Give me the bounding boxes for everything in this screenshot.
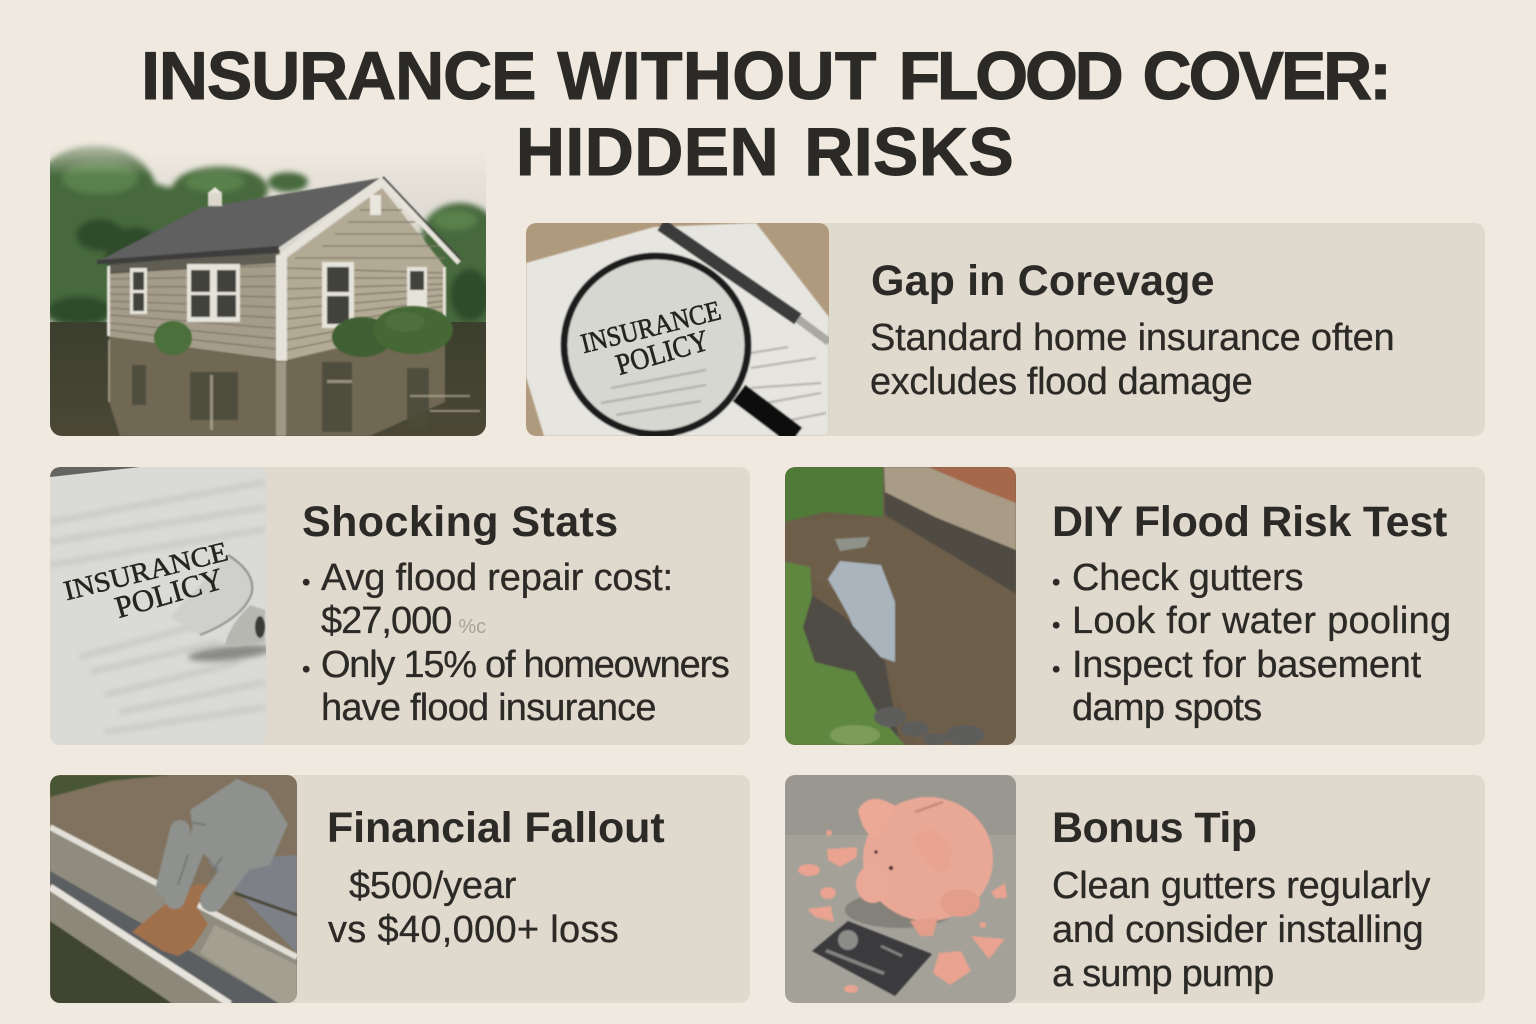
- heading: Financial Fallout: [327, 804, 665, 852]
- text block: Clean gutters regularly: [1052, 865, 1430, 907]
- heading: Shocking Stats: [302, 498, 619, 546]
- photo: broken piggy bank and credit card: [785, 775, 1016, 1003]
- panel: shocking stats: [50, 467, 750, 745]
- photo: wet ground by a wall: [785, 467, 1016, 745]
- panel: gap in coverage: [526, 223, 1485, 436]
- text block: [870, 317, 1394, 403]
- title: HIDDEN RISKS: [516, 114, 1014, 190]
- heading: DIY Flood Risk Test: [1052, 498, 1447, 546]
- photo: magnifying glass on policy: [526, 223, 829, 436]
- photo: insurance policy page: [50, 467, 266, 745]
- bullet list: •: [302, 656, 310, 683]
- title: INSURANCE WITHOUT FLOOD COVER:: [141, 38, 1389, 114]
- photo: gloved hand clearing gutter: [50, 775, 297, 1003]
- text block: $500/year: [349, 865, 516, 907]
- text block: a sump pump: [1052, 953, 1273, 995]
- bullet list: Check gutters: [1072, 557, 1303, 599]
- text block: and consider installing: [1052, 909, 1423, 951]
- bullet list: have flood insurance: [321, 687, 656, 729]
- photo: flooded house: [50, 142, 486, 436]
- trees: [25, 145, 500, 335]
- bullet list: Inspect for basement: [1072, 644, 1421, 686]
- bullet list: [302, 557, 729, 729]
- heading: Gap in Corevage: [871, 257, 1215, 305]
- text block: excludes flood damage: [870, 361, 1252, 403]
- text block: vs $40,000+ loss: [328, 909, 619, 951]
- text block: [328, 865, 619, 951]
- bullet list: •: [1052, 656, 1060, 683]
- house: [97, 177, 461, 361]
- photo: insurance policy page: POLICY: [111, 561, 227, 625]
- text block: [1052, 865, 1431, 995]
- bullet list: Avg flood repair cost:: [321, 557, 673, 599]
- bullet list: •: [302, 569, 310, 596]
- bullet list: $27,000 %c: [321, 600, 486, 642]
- bullet list: [1052, 557, 1451, 729]
- bullet list: Look for water pooling: [1072, 600, 1451, 642]
- heading: Bonus Tip: [1052, 804, 1256, 852]
- panel: bonus tip: [785, 775, 1485, 1003]
- bullet list: Only 15% of homeowners: [321, 644, 729, 686]
- photo: magnifying glass on policy: INSURANCE: [578, 295, 724, 360]
- bullet list: •: [1052, 612, 1060, 639]
- photo: insurance policy page: INSURANCE: [61, 536, 231, 607]
- bullet list: damp spots: [1072, 687, 1261, 729]
- photo: magnifying glass on policy: POLICY: [612, 324, 713, 382]
- panel: diy flood risk test: [785, 467, 1485, 745]
- bullet list: •: [1052, 569, 1060, 596]
- bushes: [154, 306, 453, 357]
- text block: Standard home insurance often: [870, 317, 1394, 359]
- title: [141, 38, 1389, 190]
- panel: financial fallout: [50, 775, 750, 1003]
